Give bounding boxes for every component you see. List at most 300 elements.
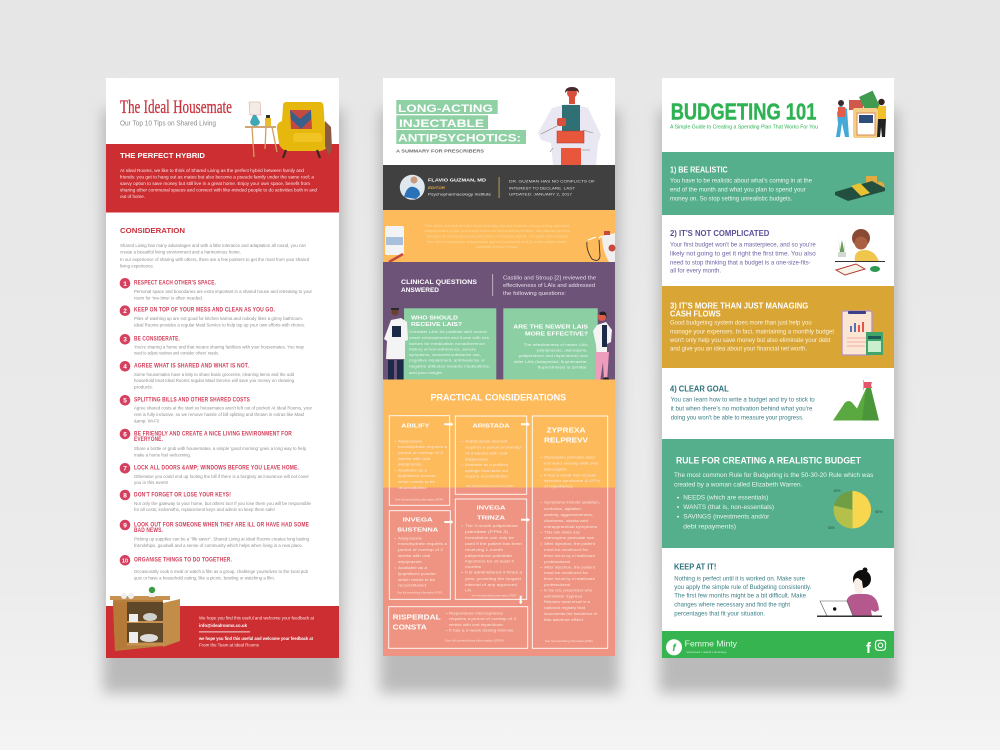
- box: Invega Sustenna: Aripiprazole: [398, 536, 423, 540]
- section 3 text: CASH FLOWS: [670, 310, 721, 319]
- title with green highlights: [396, 100, 526, 145]
- tip 10: [120, 555, 309, 580]
- box: Risperdal Consta: Risperidone microspheres: [449, 610, 503, 616]
- box: Zyprexa Relprevv: must be monitored for: [544, 547, 589, 552]
- box: Zyprexa Relprevv: of injections): [544, 484, 574, 488]
- tip 4: AGREE WHAT IS SHARED AND WHAT IS NOT.: [134, 362, 249, 369]
- box: who should receive LAIs: history of non-adherence, severe: [409, 346, 476, 351]
- tip 6: BE FRIENDLY AND CREATE A NICE LIVING ENVIRONMENT FOR: [134, 430, 292, 437]
- panel: Long-Acting Injectable Antipsychotics: [383, 78, 616, 656]
- box: who should receive LAIs: cognitive impairment, ambivalence or: [409, 358, 486, 363]
- icon: doctor with clipboard: [538, 87, 601, 165]
- box: Zyprexa Relprevv: olanzapine: [544, 466, 568, 472]
- box: Invega Sustenna: Available as a: [398, 565, 428, 570]
- box: Zyprexa Relprevv: •: [540, 588, 542, 592]
- box: Aristada: syringe that does not: [465, 468, 509, 473]
- section 3 band: [662, 286, 894, 368]
- box: Zyprexa Relprevv: Relprevv must enroll in a: [544, 599, 591, 604]
- tip 7: LOCK ALL DOORS &AMP; WINDOWS BEFORE YOU LEAVE HOME.: [134, 464, 299, 471]
- section 1 text: [670, 166, 813, 202]
- box: Zyprexa Relprevv: It has a small risk of post-: [544, 472, 597, 478]
- tip 7: Otherwise you could end up footing the bill if there is a burglary as insurance will not cover: [134, 474, 310, 479]
- box: Zyprexa Relprevv: •: [540, 530, 542, 534]
- hybrid body: savvy option to save money but still live in a great home. Enjoy your own space, benefit from: [120, 181, 310, 186]
- box: Zyprexa Relprevv: •: [540, 500, 542, 505]
- section 1 text: money on. So stop setting unrealistic budgets.: [670, 196, 793, 202]
- icon: doctor left: [384, 308, 408, 384]
- box: Zyprexa Relprevv: In the US, prescribers who: [544, 588, 593, 592]
- box: who should receive LAIs: [404, 308, 496, 380]
- box: Zyprexa Relprevv: [532, 416, 608, 648]
- keep at it text: The first few months might be a bit difficult. Make: [674, 594, 807, 600]
- box: Invega Trinza: used if the patient has been: [465, 541, 522, 546]
- box: Aristada: of 3 weeks with oral: [465, 450, 507, 455]
- box: Zyprexa Relprevv: dizziness, ataxia and: [544, 518, 588, 523]
- section 3 text: 3) IT'S MORE THAN JUST MANAGING: [670, 301, 808, 310]
- icon: social media: [866, 640, 886, 657]
- budget rule band: [662, 439, 894, 548]
- box: Zyprexa Relprevv: See full prescribing information (PDF): [545, 639, 593, 643]
- tip 2: 2: [123, 308, 127, 315]
- tip 3: You're sharing a home and that means sharing facilities with your housemates. You may: [134, 345, 305, 350]
- hybrid body: At Ideal Rooms, we like to think of Shared Living as the perfect hybrid between family and: [120, 168, 305, 173]
- box: Aristada: aripiprazole: [465, 456, 489, 461]
- box: Aristada: •: [462, 438, 464, 444]
- section 2 text: all for every month.: [670, 269, 721, 275]
- author details: Psychopharmacology Institute: [428, 193, 491, 197]
- icon: side table with lamp: [245, 102, 277, 157]
- box: Invega Trinza: •: [462, 523, 464, 528]
- box: Invega Trinza: months: [465, 564, 481, 569]
- tip 7: 7: [123, 466, 127, 473]
- orange considerations band: [383, 380, 615, 488]
- intro text: two new formulations: aripiprazole lauroxil (Aristada) and 3-month paliperidone: [428, 240, 566, 244]
- hybrid red band: [106, 144, 339, 212]
- consideration intro: [120, 243, 310, 268]
- box: Invega Sustenna: aripiprazole.: [398, 559, 423, 564]
- box: Invega Sustenna: period of overlap of 2: [398, 547, 444, 552]
- box: Zyprexa Relprevv: injection syndrome (0.07%: [544, 478, 600, 483]
- section 4 text: it but when there's no motivation behind what you're: [671, 407, 813, 413]
- tip 9: friendships, goodwill and a sense of community which helps when living in a new place.: [134, 543, 303, 548]
- box: Abilify: See full prescribing information (PDF): [395, 498, 443, 502]
- icon: money stack: [835, 176, 885, 201]
- box: Invega Sustenna: reconstituted: [398, 582, 426, 588]
- box: Abilify: ABILIFY: [401, 424, 430, 430]
- tip 5: SPLITTING BILLS AND OTHER SHARED COSTS: [134, 396, 250, 403]
- brand name: Femme Minty: [685, 640, 737, 649]
- box: who should receive LAIs: WHO SHOULD: [411, 316, 458, 322]
- clinical intro: effectiveness of LAIs and addressed: [503, 283, 595, 289]
- tip 7: you in this event!: [134, 480, 168, 485]
- title: BUDGETING 101: [671, 98, 817, 124]
- box: Zyprexa Relprevv: documents the incidence of: [544, 611, 598, 616]
- box: are the newer LAIs more effective: (aripiprazole, olanzapine,: [537, 348, 588, 352]
- icon: clipboard and calculator: [842, 311, 883, 355]
- tip 5: Agree shared costs at the start so housemates aren't left out of pocket! At Ideal Rooms, your: [134, 406, 313, 411]
- disclosure note: DR. GUZMAN HAS NO CONFLICTS OF: [509, 179, 596, 184]
- title with green highlights: INJECTABLE: [399, 118, 484, 130]
- salmon considerations band: [383, 488, 615, 656]
- tip 6: 6: [123, 431, 127, 438]
- tip 8: DON'T FORGET OR LOSE YOUR KEYS!: [134, 491, 231, 498]
- brand footer band: [662, 631, 894, 658]
- arrows between boxes: [444, 422, 530, 604]
- box: Risperdal Consta: requires a period of overlap of 3: [449, 616, 517, 621]
- tip 5: rent is fully inclusive, so we remove hassle of bill splitting and thrown in extras like Maid: [134, 412, 305, 417]
- section 1 text: 1) BE REALISTIC: [670, 166, 728, 175]
- tip 2: KEEP ON TOP OF YOUR MESS AND CLEAN AS YOU GO.: [134, 307, 275, 314]
- tip 4: [120, 361, 295, 389]
- section 4 text: [670, 384, 815, 421]
- section 1 text: You have to be realistic about what's coming in at the: [670, 179, 813, 185]
- box: Abilify: •: [394, 468, 396, 472]
- intro text: antipsychotics (LAIs, previously known as depot antipsychotics). We discuss general: [424, 229, 570, 233]
- box: Abilify: monohydrate requires a: [398, 444, 448, 449]
- footer text: we hope you find this useful and welcome your feedback at: [198, 636, 313, 641]
- box: Zyprexa Relprevv: •: [540, 472, 542, 478]
- card shadows: [103, 110, 898, 693]
- box: Invega Trinza: See full prescribing information (PDF): [472, 594, 517, 598]
- pie chart 50-30-20: 30%: [828, 526, 835, 530]
- tip 7: [120, 463, 310, 485]
- intro orange band: [383, 210, 615, 262]
- section 4 text: 4) CLEAR GOAL: [670, 384, 729, 393]
- box: Abilify: reconstituted: [398, 485, 426, 490]
- tip 1: Personal space and boundaries are extra important in a shared house and retreating to your: [134, 289, 313, 294]
- box: Invega Trinza: TRINZA: [477, 516, 505, 522]
- box: Zyprexa Relprevv: olanzapine pamoate use: [544, 535, 595, 540]
- box: Invega Trinza: year, providing the longest: [465, 576, 522, 581]
- box: are the newer LAIs more effective: ARE THE NEWER LAIS: [513, 325, 588, 331]
- title with green highlights: ANTIPSYCHOTICS:: [398, 133, 521, 145]
- section 2 text: need to stop thinking that a budget is a one-size-fits-: [670, 260, 811, 266]
- title: The Ideal Housemate: [120, 98, 232, 118]
- box: Abilify: lyophilized powder: [398, 473, 437, 478]
- box: Zyprexa Relprevv: Olanzapine pamoate does: [544, 454, 595, 460]
- tip 5: &amp; Wi-Fi!: [134, 418, 159, 423]
- box: Zyprexa Relprevv: RELPREVV: [544, 437, 588, 444]
- consideration intro: Shared Living has many advantages and with a little tolerance and adaptation all round, you can: [120, 243, 307, 248]
- box: Invega Sustenna: which needs to be: [398, 577, 436, 582]
- tip 3: BE CONSIDERATE.: [134, 335, 180, 342]
- tip 9: BAD NEWS.: [134, 527, 163, 534]
- tip 9: Picking up supplies can be a "life saver". Shared Living at Ideal Rooms creates long lasting: [134, 537, 310, 542]
- box: Invega Trinza: interval of any approved: [465, 582, 517, 587]
- clinical intro: Castillo and Stroup [2] reviewed the: [503, 275, 596, 281]
- box: Invega Trinza: formulation can only be: [465, 535, 515, 540]
- box: Zyprexa Relprevv: three hours by a healthcare: [544, 553, 596, 558]
- hybrid body: friends: you get to hang out as mates but also become a pseudo family under the same roof; a: [120, 174, 315, 180]
- box: Zyprexa Relprevv: three hours by a healthcare: [544, 576, 596, 581]
- tip 5: [120, 395, 313, 423]
- tip 1: room for 'me-time' is often needed.: [134, 295, 203, 300]
- tip 1: 1: [123, 281, 127, 288]
- intro text: [424, 224, 570, 249]
- tip 6: make a home feel welcoming.: [134, 452, 191, 457]
- clinical heading: CLINICAL QUESTIONS: [401, 279, 478, 286]
- tip 4: 4: [123, 364, 127, 371]
- box: Zyprexa Relprevv: •: [540, 541, 542, 546]
- hybrid heading: THE PERFECT HYBRID: [120, 153, 205, 160]
- brand name: [685, 640, 737, 654]
- box: Invega Sustenna: monohydrate requires a: [398, 541, 448, 546]
- box: Aristada: •: [462, 462, 464, 467]
- tip 4: products.: [134, 384, 153, 389]
- logo mark: [666, 639, 682, 655]
- subtitle: A Simple Guide to Creating a Spending Plan That Works For You: [670, 124, 818, 130]
- author details: EDITOR: [428, 186, 445, 190]
- box: Risperdal Consta: weeks with oral risperidone.: [449, 622, 504, 627]
- box: Aristada: requires a period of overlap: [465, 444, 522, 450]
- box: Zyprexa Relprevv: not need overlap with oral: [544, 460, 598, 466]
- tip 1: [120, 278, 313, 300]
- tip 10: ORGANISE THINGS TO DO TOGETHER.: [134, 557, 232, 564]
- consideration intro: living experience.: [120, 264, 154, 268]
- box: who should receive LAIs: and poor insight.: [409, 370, 443, 375]
- budget rule text: debt repayments): [683, 525, 736, 531]
- box: Risperdal Consta: •: [446, 610, 448, 616]
- box: Invega Trinza: LAI: [465, 588, 471, 592]
- box: Abilify: [389, 416, 450, 505]
- panel: Budgeting 101: [662, 78, 894, 658]
- box: Zyprexa Relprevv: professional: [544, 582, 570, 587]
- consideration intro: create a beautiful living environment and a harmonious home.: [120, 250, 241, 254]
- tip 10: quiz or have a household outing, like a picnic, bowling or watching a film.: [134, 575, 275, 580]
- icon: social media: f: [866, 640, 872, 657]
- footer red band: [106, 606, 339, 658]
- keep at it text: KEEP AT IT!: [674, 563, 716, 572]
- subtitle: Our Top 10 Tips on Shared Living: [120, 120, 216, 128]
- pie chart 50-30-20: [828, 489, 882, 530]
- box: who should receive LAIs: negative attitudes towards medications,: [409, 364, 490, 368]
- box: Abilify: period of overlap of 2: [398, 450, 444, 455]
- box: Zyprexa Relprevv: After injection, the patient: [544, 564, 596, 570]
- disclosure note: INTEREST TO DECLARE. LAST: [509, 185, 576, 190]
- box: Zyprexa Relprevv: confusion, agitation,: [544, 506, 582, 511]
- box: who should receive LAIs: factors for medication nonadherence:: [409, 341, 486, 346]
- box: Invega Trinza: [455, 499, 527, 599]
- section 4 text: doing you won't be able to measure your progress.: [671, 415, 804, 421]
- box: Aristada: ARISTADA: [472, 424, 510, 430]
- box: who should receive LAIs: RECEIVE LAIS?: [411, 322, 463, 328]
- box: are the newer LAIs more effective: The effectiveness of newer LAIs: [524, 342, 588, 347]
- box: Zyprexa Relprevv: •: [540, 564, 542, 570]
- title with green highlights: LONG-ACTING: [398, 103, 493, 115]
- clinical intro: [503, 275, 596, 297]
- box: Risperdal Consta: [389, 607, 528, 648]
- box: Risperdal Consta: It has a 2-week dosing interval.: [449, 628, 514, 632]
- purple band: [383, 262, 615, 380]
- box: Invega Trinza: palmitate (PPM-3): [465, 529, 509, 534]
- tip 3: 3: [123, 337, 127, 344]
- box: who should receive LAIs: symptoms, comorbid substance use,: [409, 352, 481, 357]
- tip 2: [120, 305, 305, 327]
- section 3 text: [669, 301, 834, 353]
- box: Abilify: which needs to be: [398, 479, 436, 484]
- clinical heading: [401, 279, 478, 294]
- box: Aristada: See full prescribing information (PDF): [466, 484, 514, 488]
- box: Abilify: Aripiprazole: [398, 438, 423, 444]
- author details: FLAVIO GUZMAN, MD: [428, 178, 487, 184]
- panel: The Ideal Housemate: [106, 78, 339, 658]
- tip 2: Piles of washing up are not good for kitchen karma and nobody likes a grimy bathroom.: [134, 316, 303, 321]
- box: Zyprexa Relprevv: national registry that: [544, 605, 586, 610]
- keep at it text: you apply the simple rule of Budgeting consistently.: [674, 585, 812, 591]
- disclosure note: [509, 179, 596, 197]
- consideration intro: In our experience of sharing with others, there are a few pointers to get the most from your shared: [120, 257, 310, 262]
- box: Risperdal Consta: •: [446, 628, 448, 632]
- box: Invega Sustenna: weeks with oral: [398, 553, 430, 558]
- disclosure note: UPDATED: JANUARY 2, 2017: [509, 192, 573, 197]
- pie chart 50-30-20: 50%: [875, 510, 882, 514]
- tip 9: [120, 520, 310, 548]
- box: Risperdal Consta: CONSTA: [393, 624, 427, 631]
- tip 3: need to adjust routines and consider others' needs.: [134, 351, 219, 356]
- hybrid body: sharing other communal spaces and connect with like-minded people to do activities both in and: [120, 188, 318, 192]
- box: Invega Trinza: •: [462, 570, 464, 574]
- tip 9: LOOK OUT FOR SOMEONE WHEN THEY ARE ILL OR HAVE HAD SOME: [134, 521, 309, 528]
- tip 2: Ideal Rooms provides a regular Maid Service to help top up your own efforts with chores.: [134, 322, 305, 327]
- tip 8: [120, 490, 312, 512]
- budget rule text: [674, 456, 873, 531]
- section 3 text: and give you an idea about your financial net worth.: [670, 347, 807, 353]
- footer text: [198, 615, 315, 647]
- box: who should receive LAIs: Consider LAIs for patients with recent-: [409, 329, 489, 334]
- section 2 text: 2) IT'S NOT COMPLICATED: [670, 229, 770, 238]
- box: Zyprexa Relprevv: anxiety, aggressiveness,: [544, 512, 593, 517]
- pie chart 50-30-20: 20%: [833, 489, 841, 493]
- section 3 text: manage your expenses. In fact, maintaining a monthly budget: [670, 329, 834, 335]
- logo mark: f: [672, 643, 677, 654]
- footer text: We hope you find this useful and welcome your feedback at: [199, 615, 315, 620]
- budget rule text: created by a woman called Elizabeth Warren.: [674, 482, 803, 488]
- tip 5: 5: [123, 398, 127, 405]
- tip 6: [120, 429, 307, 457]
- box: are the newer LAIs more effective: flupenthixol) is similar.: [538, 364, 588, 369]
- tip 8: 8: [123, 492, 127, 499]
- intro text: concepts as well as key prescribing facts of individual agents. The guide also includes: [426, 234, 568, 238]
- icon: woman at laptop: [817, 568, 882, 617]
- box: Aristada: Aripiprazole lauroxil: [465, 438, 507, 444]
- practical heading: PRACTICAL CONSIDERATIONS: [430, 392, 566, 403]
- icon: doctor right: [593, 312, 612, 384]
- budget rule text: SAVINGS (investments and/or: [683, 515, 769, 521]
- box: Abilify: aripiprazole.: [398, 462, 423, 466]
- box: Zyprexa Relprevv: administer Zyprexa: [544, 594, 583, 598]
- footer text: From the Team at Ideal Rooms: [199, 642, 260, 647]
- box: Invega Sustenna: SUSTENNA: [397, 527, 438, 533]
- box: Abilify: •: [394, 438, 396, 444]
- box: Zyprexa Relprevv: this adverse effect: [544, 617, 584, 622]
- icon: mountain with flag: [833, 380, 879, 420]
- keep at it text: percentages that fit your situation.: [674, 611, 765, 617]
- box: Invega Trinza: It is administered 4 times a: [465, 570, 523, 574]
- section 4 text: You can learn how to write a budget and try to stick to: [671, 398, 815, 404]
- icon: yellow armchair: [277, 102, 332, 158]
- author details: [428, 178, 491, 197]
- section 2 text: [670, 229, 816, 275]
- tip 1: RESPECT EACH OTHER'S SPACE.: [134, 280, 216, 287]
- consideration heading: CONSIDERATION: [120, 228, 185, 235]
- clinical heading: ANSWERED: [401, 287, 439, 294]
- keep at it text: Nothing is perfect until it is worked on. Make sure: [674, 576, 806, 582]
- box: Zyprexa Relprevv: must be monitored for: [544, 570, 589, 575]
- tip 10: 10: [122, 558, 128, 564]
- box: Aristada: Available as a prefilled: [465, 462, 508, 467]
- box: Zyprexa Relprevv: extrapyramidal symptoms: [544, 524, 597, 529]
- box: Invega Trinza: The 3-month paliperidone: [465, 523, 519, 528]
- keep at it text: changes where necessary and find the right: [674, 603, 790, 609]
- box: are the newer LAIs more effective: older LAIs (haloperidol, fluphenazine,: [514, 359, 588, 364]
- icon: student writing: [835, 229, 885, 275]
- box: Invega Trinza: injections for at least 4: [465, 558, 515, 564]
- box: Invega Sustenna: •: [394, 536, 396, 540]
- box: Aristada: require reconstitution: [465, 474, 508, 479]
- tip 4: household treat Ideal Rooms regular Maid Service will save you money on cleaning: [134, 378, 295, 383]
- box: Risperdal Consta: RISPERDAL: [393, 614, 442, 621]
- box: Invega Sustenna: [389, 511, 450, 599]
- section 2 text: Your first budget won't be a masterpiece, and so you're: [670, 243, 816, 249]
- box: are the newer LAIs more effective: [503, 308, 598, 380]
- box: Aristada: [455, 416, 527, 494]
- clinical intro: the following questions:: [503, 291, 566, 297]
- tip 6: Share a bottle or grub with housemates, a simple 'good morning' goes a long way to help: [134, 446, 307, 451]
- section 2 text: likely not going to get it right the first time. You also: [670, 251, 816, 257]
- hybrid body: [120, 168, 318, 199]
- box: Zyprexa Relprevv: This risk limits use: [544, 530, 581, 534]
- tip 10: Occasionally cook a meal or watch a film as a group, challenge yourselves to the local pub: [134, 569, 309, 574]
- tip 3: [120, 334, 305, 356]
- box: Zyprexa Relprevv: professional: [544, 559, 570, 564]
- icon: IV bag: [385, 226, 404, 262]
- intro text: palmitate (Invega Trinza).: [476, 245, 518, 249]
- intro text: This article summarizes the most clinically relevant features of long-acting injectable: [424, 224, 570, 228]
- footer text: info@idealrooms.co.uk: [199, 623, 248, 628]
- box: Abilify: weeks with oral: [398, 456, 430, 461]
- icon: stethoscope and bottle: [587, 231, 616, 262]
- tip 8: for all costs; locksmiths, replacement keys and admin so keep them safe!: [134, 507, 275, 512]
- section 3 text: won't only help you save money but also eliminate your debt: [669, 338, 831, 344]
- box: Zyprexa Relprevv: After injection, the patient: [544, 541, 596, 546]
- subtitle: A SUMMARY FOR PRESCRIBERS: [396, 149, 485, 155]
- box: are the newer LAIs more effective: paliperidone and risperidone) and: [519, 353, 588, 358]
- icon: wooden cabinet: [110, 587, 180, 651]
- box: are the newer LAIs more effective: MORE EFFECTIVE?: [525, 331, 589, 337]
- section 1 band: [662, 152, 894, 215]
- box: Invega Sustenna: •: [394, 565, 396, 570]
- box: Risperdal Consta: See full prescribing information (PDF): [445, 638, 504, 642]
- box: Zyprexa Relprevv: Symptoms include sedation,: [544, 500, 600, 505]
- budget rule text: The most common Rule for Budgeting is the 50-30-20 Rule which was: [674, 473, 873, 479]
- hybrid body: out of home.: [120, 194, 145, 199]
- tip 9: 9: [123, 522, 127, 529]
- tip 8: Not only the gateway to your home, but others too! If you lose them you will be responsible: [134, 501, 312, 506]
- box: Invega Trinza: paliperidone palmitate: [465, 553, 513, 558]
- brand name: women and money: [686, 650, 727, 654]
- box: Invega Trinza: INVEGA: [476, 506, 506, 512]
- box: Invega Sustenna: lyophilized powder: [398, 571, 437, 576]
- box: Zyprexa Relprevv: ZYPREXA: [546, 427, 586, 434]
- box: Abilify: Available as a: [398, 468, 428, 472]
- section 3 text: Good budgeting system does more than just help you: [670, 320, 812, 326]
- box: Invega Sustenna: INVEGA: [403, 518, 433, 524]
- tip 6: EVERYONE.: [134, 436, 163, 443]
- avatar: [400, 175, 425, 200]
- section 1 text: end of the month and what you plan to spend your: [670, 188, 806, 194]
- author band: [383, 165, 615, 210]
- box: Invega Sustenna: See full prescribing information (PDF): [397, 590, 442, 594]
